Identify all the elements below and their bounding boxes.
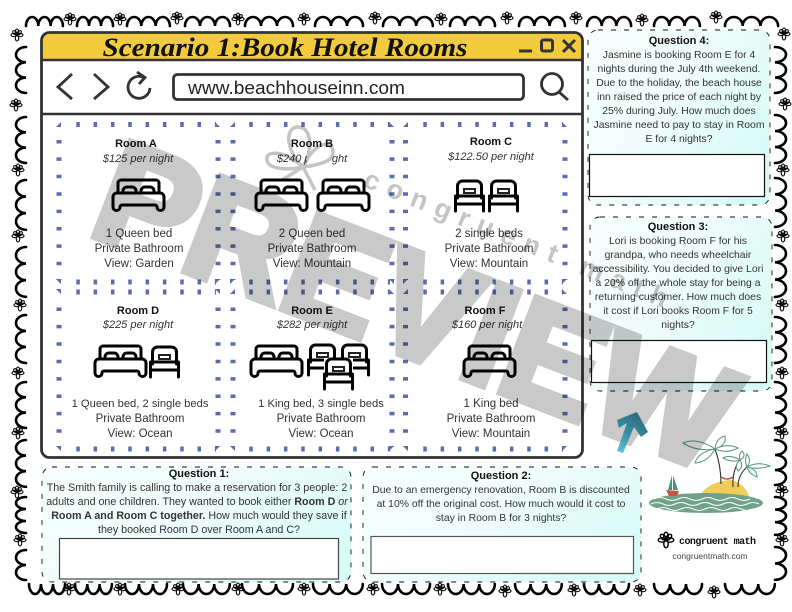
- watermark: congruent math logo: [267, 127, 672, 313]
- title: Scenario 1:Book Hotel Rooms: [102, 33, 468, 62]
- logo: congruent math: [658, 532, 756, 561]
- room F: Room F: [465, 305, 506, 317]
- panel: question 4: 25% during July. How much does: [602, 106, 756, 117]
- room F: $160 per night: [451, 319, 523, 331]
- room D: Private Bathroom: [96, 413, 184, 425]
- room E: View: Ocean: [288, 428, 354, 440]
- room F: [447, 305, 535, 440]
- panel: question 3: Question 3:: [648, 221, 708, 233]
- address bar: www.beachhouseinn.com: [187, 78, 405, 98]
- address bar: [174, 74, 524, 100]
- window controls: [519, 40, 575, 52]
- panel: question 3: accessibility. You decided to give Lori: [593, 264, 763, 275]
- panel: question 2: Due to an emergency renovation, Room B is discounted: [372, 485, 630, 496]
- arrow: teal up arrow: [617, 412, 648, 453]
- watermark: congruent math logo: congruent math: [360, 164, 672, 313]
- title bar: [42, 32, 582, 60]
- room E: $282 per night: [276, 319, 348, 331]
- panel: question 2: Question 2:: [471, 470, 531, 482]
- panel: question 4: E for 4 nights?: [645, 134, 713, 145]
- panel: question 3: nights?: [661, 320, 695, 331]
- panel: question 1: adults and one children. They wanted to book either Room D or: [46, 496, 348, 508]
- room E: Room E: [291, 305, 333, 317]
- room D: $225 per night: [102, 319, 174, 331]
- panel: question 4: Jasmine is booking Room E for 4: [603, 50, 755, 61]
- panel: question 1: The Smith family is calling to make a reservation for 3 people: 2: [47, 482, 347, 494]
- room D: 1 Queen bed, 2 single beds: [72, 398, 209, 410]
- room C: View: Mountain: [450, 258, 528, 270]
- room C: $122.50 per night: [447, 151, 535, 163]
- icon: reload: [128, 72, 150, 98]
- panel: question 2: at 10% off the original cost. How much would it cost to: [377, 499, 626, 510]
- room A: Private Bathroom: [95, 243, 183, 255]
- room B: Private Bathroom: [268, 243, 356, 255]
- room D: View: Ocean: [108, 428, 172, 440]
- room C: Private Bathroom: [445, 243, 533, 255]
- panel: question 3: it cost if Lori books Room F for 5: [603, 306, 753, 317]
- answer box: [371, 536, 634, 574]
- room B: $240 per night: [276, 153, 348, 165]
- panel: question 3: grandpa, who needs wheelchair: [605, 250, 752, 261]
- room C: 2 single beds: [455, 228, 523, 240]
- panel: browser window: [42, 32, 582, 458]
- room C: Room C: [470, 136, 512, 148]
- room B: 2 Queen bed: [279, 228, 345, 240]
- illustration: island with palms and boat: [649, 436, 770, 513]
- room F: View: Mountain: [452, 428, 530, 440]
- panel: question 4: Due to the holiday, the beach house: [596, 78, 762, 89]
- room E: [251, 305, 384, 440]
- panel: question 3: Lori is booking Room F for his: [609, 236, 747, 247]
- room A: Room A: [115, 138, 157, 150]
- panel: question 4: Question 4:: [649, 35, 709, 47]
- room B: [256, 138, 369, 270]
- answer box: [590, 154, 764, 196]
- room B: View: Mountain: [273, 258, 351, 270]
- room D: [72, 305, 209, 440]
- room E: Private Bathroom: [277, 413, 365, 425]
- panel: question 4: inn raised the price of each night by: [597, 92, 762, 103]
- answer box: [592, 340, 766, 382]
- logo: congruent math: congruent math: [679, 536, 756, 548]
- room B: Room B: [291, 138, 333, 150]
- panel: question 1: [42, 467, 351, 582]
- panel: question 1: they booked Room D over Room A and C?: [98, 524, 300, 536]
- watermark: PREVIEW: PREVIEW: [75, 110, 757, 501]
- panel: question 2: stay in Room B for 3 nights?: [436, 513, 566, 524]
- room A: [95, 138, 183, 270]
- panel: question 1: Room A and Room C together. How much would they save if: [51, 510, 347, 522]
- dotted room grid: [56, 122, 567, 451]
- logo: congruent math: congruentmath.com: [672, 551, 748, 561]
- room F: 1 King bed: [464, 398, 518, 410]
- room A: $125 per night: [102, 153, 174, 165]
- mask over Room B price: [307, 151, 332, 166]
- panel: question 1: Question 1:: [169, 468, 229, 480]
- panel: question 3: returning customer. How much does: [595, 292, 761, 303]
- panel: question 4: nights during the July 4th weekend.: [598, 64, 760, 75]
- room F: Private Bathroom: [447, 413, 535, 425]
- panel: question 4: Jasmine need to pay to stay in Room: [594, 120, 764, 131]
- icon: search: [542, 74, 568, 100]
- room A: View: Garden: [104, 258, 174, 270]
- panel: question 4: [588, 30, 770, 205]
- back and forward arrows: [58, 74, 108, 99]
- room D: Room D: [117, 305, 159, 317]
- room E: 1 King bed, 3 single beds: [258, 398, 384, 410]
- panel: question 3: a 20% off the whole stay for being a: [595, 278, 761, 289]
- room C: [445, 136, 535, 270]
- panel: question 3: [590, 217, 772, 391]
- room A: 1 Queen bed: [106, 228, 172, 240]
- answer box: [60, 538, 338, 579]
- panel: question 2: [363, 467, 641, 582]
